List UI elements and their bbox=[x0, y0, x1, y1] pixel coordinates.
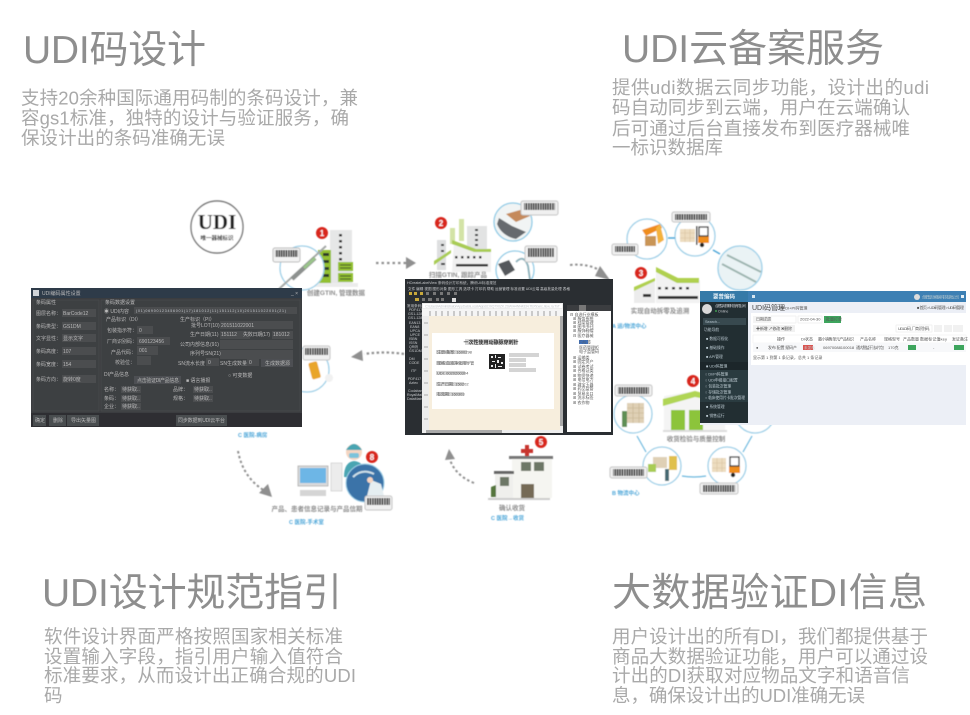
dashboard page title: ■ 首页 > UDI码管理 > UDI码管理 bbox=[917, 304, 964, 310]
arrow: to inspection bbox=[637, 436, 646, 452]
badge: step 3 bbox=[635, 267, 647, 279]
group: operating room bbox=[272, 444, 392, 526]
heading: big data DI verification: 大数据验证DI信息 bbox=[612, 572, 927, 615]
badge: step 2: 2 bbox=[439, 219, 444, 228]
dashboard sidebar: Online bbox=[718, 310, 728, 314]
left property panel: 条码类型： bbox=[36, 323, 61, 330]
dashboard sidebar: 合肥智动物联科技有限公司 bbox=[715, 303, 746, 308]
data table box: 06970088100018 bbox=[823, 345, 855, 350]
catalog tree panel: ⊞ 电信电力 bbox=[573, 376, 593, 382]
canvas area: C:\Users\Administrator\AppData\Local\Apps\2.0\Q7X0ZK.2SW\A4NN4334.TBX\barc..itew..\a.TxT bbox=[425, 304, 561, 308]
software title and toolbar: 文件 编辑 视图 图形对象 图形工具 选项卡 打印机 帮助 运营管理 标准设置 UDI云端 高级批量处理 表格 bbox=[408, 286, 570, 291]
icon: forklift lower bbox=[700, 447, 746, 494]
barcode data settings panel: 001 bbox=[139, 348, 148, 354]
heading: UDI code design: UDI码设计 bbox=[23, 29, 206, 72]
left property panel: 显示文字 bbox=[63, 335, 83, 342]
panel: big data DI verification bbox=[612, 572, 928, 706]
bottom button bar: 确定 bbox=[35, 417, 45, 424]
barcode type sidebar: ISBN bbox=[409, 337, 418, 341]
caption: patient record: 产品、患者信息记录与产品信期 bbox=[272, 504, 363, 513]
barcode data settings panel: 0 bbox=[249, 360, 252, 366]
catalog tree panel: ⊟ 自选行业模板 bbox=[570, 311, 598, 317]
icon: worker with pallet bbox=[614, 385, 652, 433]
barcode type sidebar: EAN13 bbox=[409, 321, 420, 325]
catalog tree panel: ⊞ 珠宝玉器 bbox=[573, 381, 593, 387]
icon: sorting circle bbox=[612, 219, 667, 259]
window title bar: UDI编码属性设置 bbox=[42, 290, 81, 297]
barcode type sidebar: DataMatrix bbox=[407, 397, 425, 401]
catalog tree panel: ⊞ 档案管理 bbox=[573, 319, 593, 325]
barcode data settings panel: 181012 bbox=[273, 332, 290, 338]
text block: design guidance description: 软件设计界面严格按照国家相关标准 bbox=[44, 626, 343, 647]
caption: scan GTIN: 扫描GTIN, 跟踪产品 bbox=[429, 270, 488, 279]
barcode type sidebar: UPCA bbox=[410, 329, 421, 333]
heading: UDI design guidance: UDI设计规范指引 bbox=[42, 572, 342, 615]
barcode data settings panel: 690123456 bbox=[139, 339, 164, 345]
step 2: distributor building and scanners bbox=[429, 201, 558, 289]
barcode type sidebar: EAN8 bbox=[410, 325, 419, 329]
catalog tree panel: ⊞ 合格证类 bbox=[573, 367, 593, 373]
left property panel: 107 bbox=[63, 349, 72, 355]
barcode data settings panel: 0 bbox=[208, 360, 211, 366]
label preview: 一次性使用动静脉穿刺针 bbox=[463, 339, 519, 346]
data table box bbox=[751, 313, 968, 365]
window title bar bbox=[31, 288, 302, 298]
text block: UDI code design description: 容gs1标准，独特的设计与验证服务，确 bbox=[21, 108, 349, 128]
catalog tree panel: ⊞ 物资快递 bbox=[573, 372, 593, 378]
dashboard header bbox=[700, 291, 966, 302]
caption: hospital receiving: C 医院→收货 bbox=[491, 514, 525, 522]
barcode data settings panel: ◉ UDI内容 bbox=[104, 308, 129, 315]
arrow: step 1 to step 2 bbox=[376, 257, 416, 269]
data table box: 日期范围 bbox=[756, 316, 772, 322]
barcode data settings panel: ■ 语言播报 bbox=[186, 377, 210, 384]
caption: automated sorting: 实现自动拆零及追溯 bbox=[631, 306, 690, 315]
label preview: UDI: 0020200304 bbox=[437, 370, 469, 376]
dashboard sidebar: ■ 销售运行 bbox=[706, 413, 725, 418]
catalog tree panel: ⊞ 洗水标签 bbox=[573, 394, 593, 400]
barcode type sidebar: 常用条码库 bbox=[407, 303, 425, 308]
icon: conveyor circle bbox=[718, 246, 762, 290]
barcode type sidebar: GS1-128 bbox=[408, 316, 422, 320]
data table box: 产品数量 bbox=[903, 336, 919, 342]
badge: step 3: 3 bbox=[639, 269, 644, 278]
barcode type sidebar: ISSN bbox=[409, 341, 418, 345]
bottom button bar bbox=[31, 413, 302, 427]
barcode data settings panel: SN流水长度 bbox=[178, 360, 205, 367]
catalog tree panel: ⊞ 图书书刊 bbox=[573, 323, 593, 329]
caption: confirm receipt: 确认收货 bbox=[499, 503, 526, 512]
barcode data settings panel: 生产日期(11) bbox=[190, 331, 219, 338]
window title bar: _ × bbox=[290, 291, 298, 297]
icon: UDI logo badge: 唯一器械标识 bbox=[200, 234, 234, 242]
badge: step 4: 4 bbox=[691, 377, 696, 386]
label preview bbox=[432, 333, 554, 409]
data table box: 未发布 bbox=[804, 345, 815, 350]
barcode data settings panel: 条码： bbox=[104, 395, 119, 402]
icon: computer workstation bbox=[298, 463, 342, 496]
icon: worker with boxes bbox=[610, 447, 681, 485]
barcode type sidebar: CODE bbox=[409, 361, 420, 365]
barcode data settings panel: 待获取.. bbox=[194, 386, 212, 393]
step 1: manufacturer building and syringe bbox=[273, 227, 366, 297]
bottom button bar: 导出矢量图 bbox=[71, 417, 96, 424]
barcode data settings panel: 品牌： bbox=[173, 386, 188, 393]
panel: UDI barcode properties window bbox=[31, 288, 302, 427]
barcode data settings panel: 失效日期(17) bbox=[243, 331, 270, 338]
barcode type sidebar: DM bbox=[409, 357, 415, 361]
dashboard sidebar: ○ UDI申报接口配置 bbox=[705, 378, 738, 382]
data table box: 最小销售单元产品标识 bbox=[818, 336, 854, 342]
heading: UDI cloud filing service: UDI云备案服务 bbox=[622, 28, 884, 71]
data table box: 显示第 1 到第 1 条记录，总共 1 条记录 bbox=[753, 354, 822, 360]
barcode data settings panel: 序列号SN(21) bbox=[190, 350, 221, 357]
data table box: UDI-DI码, 厂商识别码, bbox=[898, 325, 930, 331]
text block: cloud filing description: 码自动同步到云端，用户在云端确认 bbox=[612, 97, 910, 118]
barcode data settings panel: 产品代码： bbox=[111, 349, 136, 356]
dashboard sidebar: ○ DI/PI码管理 bbox=[705, 372, 728, 376]
canvas area bbox=[422, 303, 563, 433]
text block: design guidance description bbox=[44, 626, 356, 706]
dashboard sidebar: Search... bbox=[705, 320, 720, 324]
barcode data settings panel: 待获取.. bbox=[122, 395, 140, 402]
text block: UDI code design description bbox=[21, 88, 358, 148]
dashboard sidebar: ■ UDI码管理 bbox=[706, 364, 727, 368]
dashboard sidebar: ■ 数据可视化 bbox=[706, 336, 729, 341]
dashboard sidebar: ■ 系统管理 bbox=[706, 404, 725, 409]
left property panel: 154 bbox=[63, 362, 72, 368]
data table box: 产品名称 bbox=[860, 336, 876, 342]
catalog tree panel: ⊞ 固定资产 bbox=[573, 358, 593, 364]
barcode data settings panel: 条码数据设置 bbox=[105, 299, 135, 306]
arrow: forklift upward bbox=[743, 436, 752, 452]
supply chain diagram bbox=[191, 201, 775, 526]
caption: operating room: C 医院-手术室 bbox=[289, 518, 324, 526]
text block: DI verification description bbox=[612, 626, 928, 706]
barcode data settings panel: 201511022001 bbox=[221, 323, 254, 329]
barcode data settings panel: 校验位： bbox=[115, 359, 135, 366]
barcode data settings panel: 产品标识（DI） bbox=[106, 316, 141, 323]
left property panel: 文字显性： bbox=[36, 335, 61, 342]
panel: UDI cloud filing service bbox=[612, 28, 929, 158]
arrow: hospital to ward bbox=[445, 449, 474, 483]
catalog tree panel: 医药管理柜 bbox=[579, 344, 599, 350]
left property panel: 条码高度： bbox=[36, 348, 61, 355]
barcode data settings panel: ○ 可变数据 bbox=[228, 372, 252, 379]
group: logistics center A bbox=[612, 212, 762, 330]
text block: cloud filing description: 一标识数据库 bbox=[612, 137, 723, 158]
barcode data settings panel: (01)06900123456001(17)181012(11)151112(10)201511022001(21) bbox=[136, 309, 286, 313]
barcode data settings panel: 批号LOT(10) bbox=[191, 322, 220, 329]
barcode type sidebar: GS1DM bbox=[409, 349, 422, 353]
text block: UDI code design description: 保设计出的条码准确无误 bbox=[21, 128, 225, 148]
data table box: - bbox=[933, 345, 935, 350]
icon: scanner circle one bbox=[494, 201, 558, 241]
data table box: 通大脱盐干法1片包 bbox=[856, 344, 884, 350]
barcode data settings panel: 公司内部信息(91) bbox=[180, 341, 219, 348]
barcode type sidebar: QR码 bbox=[409, 344, 418, 349]
arrow: inspection to forklift bbox=[682, 476, 706, 477]
panel: label design software window bbox=[405, 279, 613, 435]
dashboard sidebar: 功能导航 bbox=[704, 327, 719, 332]
data table box: 数据标记值key bbox=[920, 336, 947, 342]
caption: receiving inspection: 收货检验与质量控制 bbox=[667, 434, 726, 443]
catalog tree panel: 内标签 bbox=[579, 338, 591, 344]
barcode type sidebar: RoyalMail bbox=[407, 393, 423, 397]
text block: cloud filing description bbox=[612, 77, 929, 158]
barcode data settings panel: 待获取.. bbox=[122, 386, 140, 393]
barcode data settings panel: 151112 bbox=[221, 332, 237, 338]
label preview: 注册/备案: 1600298 bbox=[437, 348, 473, 354]
catalog tree panel: ⊞ 服务系统 bbox=[573, 315, 593, 321]
catalog tree panel: ⊟ 医疗器械 bbox=[573, 332, 593, 338]
barcode data settings panel: 生成数据源 bbox=[265, 360, 290, 367]
catalog tree panel bbox=[567, 305, 611, 432]
dashboard sidebar: ■ API管理 bbox=[706, 354, 723, 359]
icon: forklift circle bbox=[672, 212, 715, 256]
barcode data settings panel: DI产品信息 bbox=[104, 371, 129, 378]
data table box: ● bbox=[756, 345, 759, 350]
barcode data settings panel: 企业： bbox=[104, 403, 119, 410]
barcode type sidebar: Aztec bbox=[409, 381, 418, 385]
caption: hospital ward: C 医院-病房 bbox=[238, 431, 268, 439]
group: hospital receiving bbox=[488, 436, 553, 522]
data table box: 发布 配置 赋码产 bbox=[768, 344, 797, 350]
dashboard page title: UDI码管理 bbox=[752, 303, 785, 312]
barcode data settings panel: 名称： bbox=[104, 386, 119, 393]
text block: design guidance description: 码 bbox=[44, 685, 63, 706]
catalog tree panel: ⊞ 贸易出口 bbox=[573, 390, 593, 396]
barcode data settings panel: 包装指示符： bbox=[107, 327, 137, 334]
icon: partial circle behind dashboard bbox=[735, 393, 775, 433]
software title and toolbar bbox=[407, 280, 570, 302]
dashboard sidebar bbox=[700, 302, 748, 423]
barcode type sidebar: GS1-128 bbox=[408, 312, 422, 316]
data table box: ✚新增 ↗修改 ✖删除 bbox=[756, 325, 792, 331]
icon: UDI logo badge bbox=[191, 201, 243, 253]
icon: ward circle with medicine bbox=[285, 346, 333, 392]
icon: scanner circle two bbox=[496, 246, 557, 289]
barcode data settings panel: 点击验证DI产品信息 bbox=[137, 377, 179, 384]
text block: design guidance description: 标准要求，从而设计出正确合规的UDI bbox=[44, 665, 356, 686]
data table box: DI状态 bbox=[801, 336, 813, 342]
catalog tree panel: ⊞ 药品监管 bbox=[573, 385, 593, 391]
text block: UDI code design description: 支持20余种国际通用码制的条码设计，兼 bbox=[21, 88, 358, 108]
barcode type sidebar: Codabar bbox=[408, 389, 423, 393]
barcode type sidebar: UPCE bbox=[410, 333, 421, 337]
barcode data settings panel: 0 bbox=[139, 328, 142, 334]
panel: UDI code design bbox=[21, 29, 358, 148]
dashboard page title: UDI-DI+PI码管理 bbox=[777, 304, 807, 310]
barcode type sidebar: PDF417 bbox=[409, 308, 422, 312]
arrow: forklift to conveyor bbox=[713, 250, 720, 254]
arrow: ward to operating room bbox=[238, 451, 272, 497]
icon: warehouse 3 bbox=[634, 267, 700, 303]
caption: logistics center B: B 物流中心 bbox=[612, 489, 640, 497]
dashboard header: 合肥智动物联科技有限公司 bbox=[922, 294, 959, 300]
barcode type sidebar: ITF bbox=[411, 369, 417, 373]
text block: DI verification description: 商品大数据验证功能，用户可以通过设 bbox=[612, 646, 928, 667]
data table box: 批量打单 bbox=[826, 316, 842, 322]
left property panel: 旋转0度 bbox=[63, 376, 81, 383]
dashboard header: 要普编码 bbox=[713, 292, 735, 300]
dashboard sidebar: ○ 包装批次管理 bbox=[705, 384, 731, 388]
label preview: 有效期: 160303 bbox=[437, 390, 465, 396]
bottom button bar: 删除 bbox=[53, 417, 63, 424]
left property panel: GS1DM bbox=[63, 324, 81, 330]
data table box: 170克 bbox=[888, 344, 899, 350]
left property panel: 条码方向： bbox=[36, 376, 61, 383]
barcode type sidebar bbox=[407, 303, 425, 401]
label preview: 生产日期: 150202 bbox=[437, 380, 469, 386]
caption: create GTIN: 创建GTIN, 管理数据 bbox=[307, 288, 366, 297]
data table box: 2022-04-30 bbox=[800, 316, 821, 322]
icon: UDI logo badge: UDI bbox=[198, 210, 236, 234]
barcode data settings panel bbox=[101, 299, 300, 411]
text block: cloud filing description: 后可通过后台直接发布到医疗器械唯 bbox=[612, 118, 910, 139]
text block: DI verification description: 息，确保设计出的UDI准确无误 bbox=[612, 685, 865, 706]
badge: step 8: 8 bbox=[370, 453, 375, 462]
catalog tree panel: ⊞ 农作物 bbox=[573, 399, 589, 405]
group: logistics center B bbox=[610, 375, 775, 497]
icon: hospital building bbox=[488, 445, 553, 500]
panel: UDI management dashboard bbox=[700, 291, 968, 425]
barcode data settings panel: 厂商识别码： bbox=[107, 338, 137, 345]
arrow: sorting to forklift bbox=[668, 237, 675, 239]
dashboard sidebar: ■ 基础操作 bbox=[706, 345, 725, 350]
data table box: 规格型号 bbox=[884, 336, 900, 342]
dashboard sidebar: ○ 临床使用片卡批次管理 bbox=[705, 395, 745, 400]
badge: step 5: 5 bbox=[539, 438, 544, 447]
left property panel: 条码属性 bbox=[36, 299, 56, 306]
label preview: 规格:血液净化用导管 bbox=[437, 360, 474, 366]
data table box: 发证备注 bbox=[952, 336, 968, 342]
arrow: step 2 to logistics center A bbox=[570, 265, 610, 280]
left property panel: BarCode12 bbox=[63, 311, 89, 317]
barcode data settings panel: 规格： bbox=[173, 395, 188, 402]
left property panel: 条码宽度： bbox=[36, 361, 61, 368]
barcode type sidebar: PDF417 bbox=[408, 377, 421, 381]
icon: green warehouse bbox=[663, 391, 727, 432]
left property panel: 图层名称： bbox=[36, 310, 61, 317]
text block: design guidance description: 设置输入字段，指引用户输入值符合 bbox=[44, 646, 343, 667]
catalog tree panel: 电子监管码 bbox=[579, 348, 599, 354]
left property panel bbox=[33, 299, 99, 411]
bottom button bar: 同步数据到UDI云平台 bbox=[178, 417, 225, 424]
data table box: 操作 bbox=[777, 336, 785, 342]
software title and toolbar: HCreateLabelView 条码设计打印系统，腾讯UI/标准规范 bbox=[407, 280, 497, 285]
dashboard page title bbox=[752, 303, 964, 312]
catalog tree panel: ⊞ 试卷考试 bbox=[573, 363, 593, 369]
QR code bbox=[489, 354, 505, 369]
badge: step 4 bbox=[687, 375, 699, 387]
barcode data settings panel: 生产标识（PI） bbox=[180, 316, 215, 323]
dashboard sidebar: ○ 存储批次管理 bbox=[705, 390, 731, 394]
badge: step 1: 1 bbox=[320, 229, 325, 238]
panel: UDI design guidance bbox=[42, 572, 356, 706]
catalog tree panel: ⊞ 运输类 bbox=[573, 354, 589, 360]
barcode data settings panel: SN生成数量 bbox=[220, 360, 247, 367]
text block: DI verification description: 用户设计出的所有DI，我们都提供基于 bbox=[612, 626, 928, 647]
barcode data settings panel: 待获取.. bbox=[194, 395, 212, 402]
icon: surgeon bbox=[344, 444, 392, 510]
catalog tree panel: ⊞ 服饰鞋帽 bbox=[573, 327, 593, 333]
arrow: designer to ward bbox=[351, 350, 404, 361]
text block: DI verification description: 计出的DI获取对应物品文字和语音信 bbox=[612, 665, 910, 686]
caption: logistics center A: A 运/物流中心 bbox=[612, 322, 647, 330]
text block: cloud filing description: 提供udi数据云同步功能，设计出的udi bbox=[612, 77, 929, 98]
barcode data settings panel: 待获取.. bbox=[122, 403, 140, 410]
